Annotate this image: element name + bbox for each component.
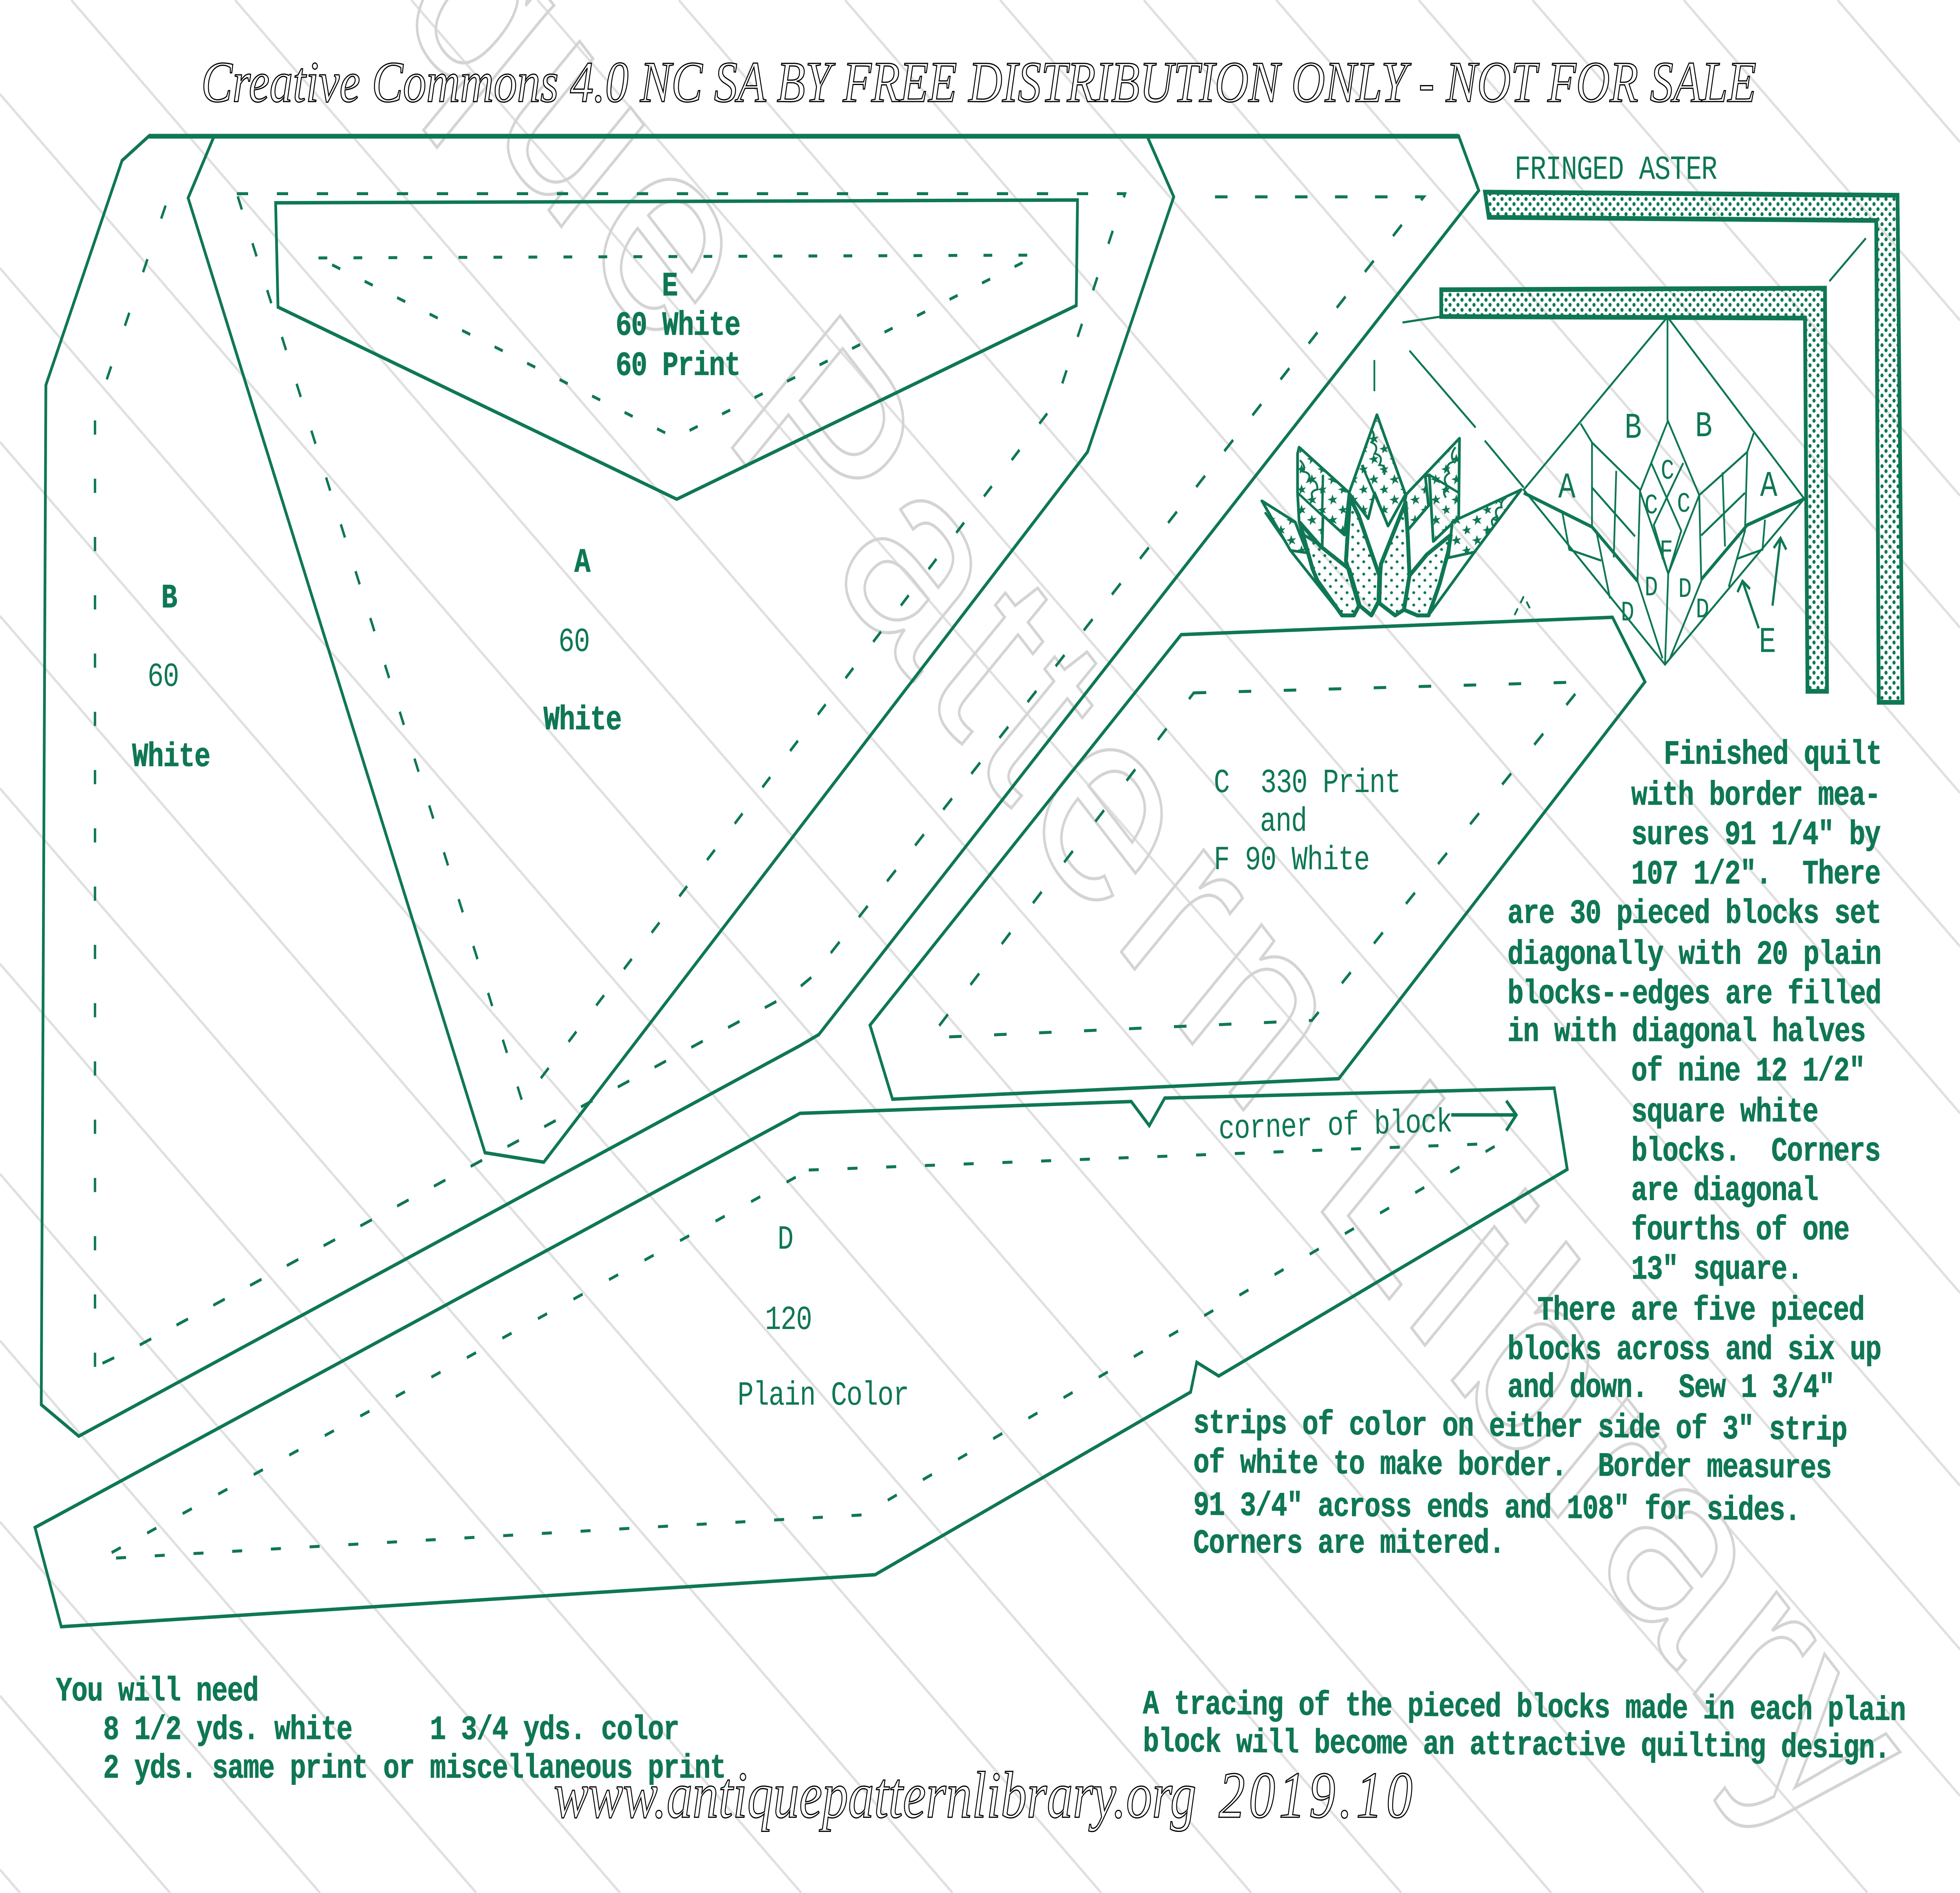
pattern piece E [276,200,1078,499]
label: A 60 White: White [543,701,621,740]
pattern piece B [41,136,1479,1436]
text block: finished quilt instructions: There are five pieced [1537,1292,1864,1330]
text block: tracing note [1143,1686,1906,1768]
label: C 330 Print and F 90 White: and [1260,803,1307,841]
label: D 120 Plain Color: 120 [765,1301,812,1340]
piece letters: D [1696,594,1709,626]
text block: finished quilt instructions: Finished quilt [1664,736,1882,774]
label: A 60 White [543,544,621,740]
label: A 60 White: A [574,544,591,582]
text block: tracing note: block will become an attractive quilting design. [1143,1723,1890,1768]
text block: finished quilt instructions: strips of color on either side of 3" strip [1193,1405,1847,1450]
text block: you will need [56,1673,726,1788]
label: D 120 Plain Color [737,1221,909,1415]
arrow: corner of block [1451,1101,1516,1131]
text block: finished quilt instructions: diagonally with 20 plain [1508,936,1881,974]
label: E 60 White 60 Print: E [662,267,677,306]
text block: finished quilt instructions: blocks across and six up [1508,1331,1881,1369]
label: D 120 Plain Color: D [777,1221,793,1259]
piece letters: C [1644,490,1658,522]
label: A 60 White: 60 [558,623,590,662]
piece letters: F [1659,536,1673,568]
footer: website and date: www.antiquepatternlibrary.org [554,1758,1196,1831]
text block: finished quilt instructions: 107 1/2". There [1631,856,1880,894]
pattern piece D [35,1088,1567,1627]
border strip: outer [1485,192,1902,702]
text block: finished quilt instructions: fourths of one [1631,1211,1849,1250]
text block: you will need: 2 yds. same print or miscellaneous print [103,1750,726,1788]
label: E 60 White 60 Print: 60 White [615,307,740,345]
text block: finished quilt instructions: in with diagonal halves [1508,1013,1866,1051]
block name: Fringed Aster: FRINGED ASTER [1515,151,1717,189]
text block: finished quilt instructions: are diagonal [1631,1172,1818,1210]
border strip: inner [1441,288,1827,691]
text block: finished quilt instructions: are 30 pieced blocks set [1508,895,1881,933]
text block: finished quilt instructions: square white [1631,1093,1818,1131]
pattern piece A [188,137,1174,1162]
label: E 60 White 60 Print: 60 Print [615,347,740,385]
piece letters: A [1760,466,1778,507]
label: C 330 Print and F 90 White: F 90 White [1214,841,1369,880]
text block: finished quilt instructions: 91 3/4" across ends and 108" for sides. [1193,1487,1800,1530]
piece letters: C [1661,455,1674,488]
piece letters: A [1558,468,1576,509]
label: corner of block: corner of block [1218,1104,1452,1149]
label: C 330 Print and F 90 White [1214,764,1401,880]
pattern piece C [870,617,1645,1099]
text block: finished quilt instructions [1193,736,1882,1563]
arrows to E pieces [1737,538,1786,628]
text block: finished quilt instructions: and down. Sew 1 3/4" [1508,1369,1834,1407]
footer: website and date: 2019.10 [1219,1758,1412,1831]
piece letters: D [1644,572,1658,604]
label: E 60 White 60 Print [615,267,740,385]
label: B 60 White [132,579,210,776]
text block: finished quilt instructions: of nine 12 1/2" [1631,1052,1865,1091]
flower petals [1262,415,1521,615]
label: B 60 White: B [161,579,177,618]
piece letters: C [1677,488,1690,520]
piece letters: E [1759,622,1776,663]
text block: finished quilt instructions: sures 91 1/4" by [1631,816,1880,854]
piece letters [1558,407,1778,663]
text block: finished quilt instructions: blocks. Corners [1631,1133,1880,1171]
label: B 60 White: 60 [147,658,179,696]
text block: finished quilt instructions: with border mea- [1631,777,1880,815]
piece letters: B [1695,407,1712,448]
text block: finished quilt instructions: Corners are mitered. [1193,1525,1504,1563]
diagram: printed flower block [1262,351,1531,615]
diagram: pieced block with piece letters [1524,317,1804,665]
piece letters: D [1678,573,1692,606]
text block: finished quilt instructions: blocks--edges are filled [1508,976,1881,1014]
text block: finished quilt instructions: of white to make border. Border measures [1193,1444,1831,1488]
title: Creative Commons 4.0 NC SA BY FREE DISTRIBUTION ONLY - NOT FOR SALE [201,50,1756,114]
label: B 60 White: White [132,738,210,776]
text block: tracing note: A tracing of the pieced blocks made in each plain [1143,1686,1906,1730]
text block: you will need: You will need [56,1673,258,1711]
piece letters: D [1621,597,1634,629]
text block: you will need: 8 1/2 yds. white 1 3/4 yds. color [103,1711,679,1750]
text block: finished quilt instructions: 13" square. [1631,1251,1802,1289]
piece letters: B [1624,408,1642,449]
label: D 120 Plain Color: Plain Color [737,1377,909,1415]
label: C 330 Print and F 90 White: C 330 Print [1214,764,1401,803]
